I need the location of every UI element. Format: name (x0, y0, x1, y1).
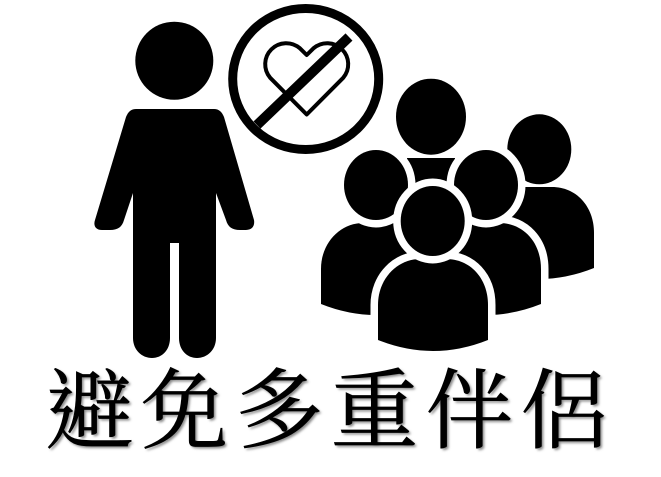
icon: standing person (94, 22, 254, 358)
icon: no-love prohibition sign (233, 8, 379, 150)
person: middle left (321, 150, 431, 315)
title: 避免多重伴侶 (46, 363, 608, 460)
person: back centre (396, 79, 466, 205)
icon: crowd of people (321, 79, 594, 351)
title shadow: 避免多重伴侶 (48, 365, 610, 462)
person: middle right (431, 150, 541, 315)
person: front centre (378, 186, 488, 351)
person: back right (484, 114, 594, 279)
